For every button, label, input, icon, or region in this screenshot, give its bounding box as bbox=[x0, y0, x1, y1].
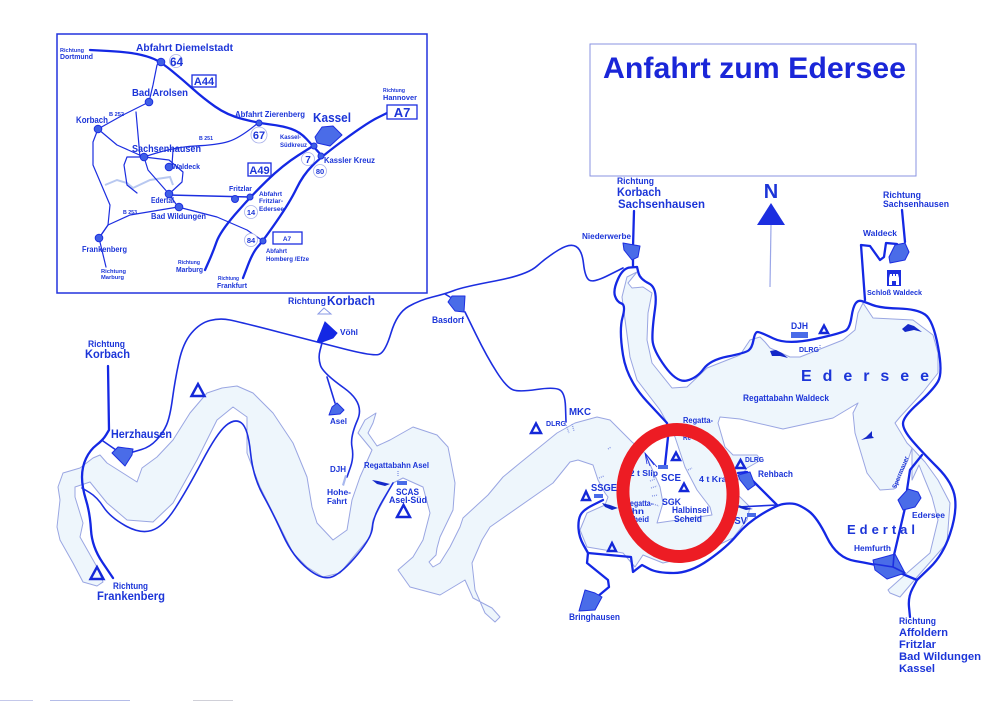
town: Rehbach bbox=[738, 472, 755, 490]
map labels: Edersee bbox=[912, 510, 945, 520]
road: Rehbach jetty bbox=[738, 505, 777, 507]
map labels: Regatta- bbox=[683, 416, 713, 425]
autobahn label boxes bbox=[192, 75, 417, 244]
north arrow bbox=[757, 181, 785, 287]
inset labels: Bad Arolsen bbox=[132, 88, 188, 99]
inset labels: Richtung bbox=[101, 269, 126, 275]
autobahn A44 bbox=[90, 50, 322, 156]
camping tent icons bbox=[90, 326, 828, 579]
inset labels: Kassler Kreuz bbox=[324, 156, 375, 165]
map labels: DLRG bbox=[799, 347, 820, 354]
map labels: Scheid bbox=[674, 514, 702, 524]
inset labels: A7 bbox=[394, 105, 410, 120]
icon: diver Waldeck bbox=[770, 350, 788, 358]
inset frame bbox=[57, 34, 427, 293]
map labels: SSGE bbox=[591, 482, 617, 494]
inset labels: Richtung bbox=[218, 276, 239, 282]
map labels: Basdorf bbox=[432, 315, 465, 325]
map labels: Sperrmauer bbox=[891, 455, 911, 490]
inset labels: Hannover bbox=[383, 93, 417, 102]
buoy and slip markers bbox=[398, 345, 820, 506]
map labels: Fritzlar bbox=[899, 639, 937, 651]
autobahn A49 bbox=[205, 146, 313, 270]
icon: DJH Hohe-Fahrt hostel bbox=[342, 475, 347, 486]
road: south shore and Hemfurth bbox=[588, 504, 917, 617]
inset labels: 67 bbox=[253, 130, 265, 142]
inset minor roads bbox=[93, 62, 263, 267]
icon: rowing boat Rehbach bbox=[738, 505, 753, 510]
inset labels: Waldeck bbox=[172, 162, 201, 171]
road: Rehbach bbox=[738, 472, 777, 505]
town: Niederwerbe bbox=[623, 243, 640, 260]
map labels: Re bbox=[683, 433, 691, 442]
map labels: Edertal bbox=[847, 522, 915, 537]
map labels: Richtung bbox=[113, 581, 148, 591]
road: Niederwerbe north bbox=[633, 211, 634, 247]
inset labels: 14 bbox=[247, 208, 256, 217]
map labels: Waldeck bbox=[863, 228, 897, 238]
inset labels: Edertal bbox=[151, 196, 174, 205]
map labels: Scheid bbox=[624, 515, 649, 524]
inset labels: 64 bbox=[170, 55, 183, 69]
club house bars bbox=[397, 332, 808, 517]
map labels: Niederwerbe bbox=[582, 231, 631, 241]
map labels: DLRG bbox=[745, 457, 765, 464]
road: along the western river bbox=[82, 421, 393, 578]
inset labels: 80 bbox=[316, 167, 324, 176]
road: Basdorf stub bbox=[445, 294, 450, 297]
map labels: Richtung bbox=[899, 616, 936, 626]
map labels: MKC bbox=[569, 407, 591, 418]
map labels: Herzhausen bbox=[111, 427, 172, 441]
icon: castle Schloss Waldeck bbox=[887, 270, 901, 286]
inset labels: A7 bbox=[283, 236, 292, 243]
map labels: DJH bbox=[791, 321, 808, 331]
map labels: Korbach bbox=[327, 294, 375, 308]
road: Edersee to Hemfurth bbox=[894, 508, 905, 555]
Kassel city shape bbox=[315, 126, 342, 146]
inset map: regional overview bbox=[57, 34, 427, 293]
inset lake squiggle bbox=[105, 177, 173, 188]
inset labels: Abfahrt bbox=[266, 248, 288, 255]
map labels: SCE bbox=[661, 472, 681, 484]
inset labels: Dortmund bbox=[60, 52, 93, 61]
road: west shore to Scheid bbox=[614, 267, 668, 465]
town: Bringhausen bbox=[579, 590, 602, 611]
road: Sachsenhausen north bbox=[902, 210, 905, 242]
inset labels: Richtung bbox=[178, 260, 200, 266]
town: Herzhausen bbox=[112, 447, 133, 466]
inset labels: Richtung bbox=[383, 88, 405, 94]
town: Waldeck bbox=[889, 243, 909, 263]
town: Voehl bbox=[317, 322, 337, 342]
inset labels: Bad Wildungen bbox=[151, 211, 206, 221]
inset labels bbox=[60, 42, 417, 290]
town: Edersee bbox=[898, 489, 921, 510]
inset labels: Korbach bbox=[76, 115, 108, 125]
inset labels: Homberg /Efze bbox=[266, 256, 309, 263]
inset labels: Kassel bbox=[313, 110, 351, 125]
road: Herzhausen stub bbox=[103, 441, 116, 450]
map labels: 4 t Kran bbox=[699, 475, 732, 484]
map labels: Kassel bbox=[899, 663, 935, 675]
map labels: 12 t Slip bbox=[625, 468, 658, 478]
inset labels: Fritzlar bbox=[229, 186, 252, 193]
inset labels: Abfahrt bbox=[259, 191, 283, 198]
road: Bringhausen bbox=[578, 500, 609, 597]
road: Basdorf to MKC bbox=[465, 312, 566, 422]
road: Voehl to Hohe-Fahrt bbox=[319, 343, 359, 477]
map labels: DJH bbox=[330, 464, 346, 474]
inset labels: A49 bbox=[249, 165, 270, 177]
map labels: Affoldern bbox=[899, 627, 948, 639]
map labels bbox=[85, 176, 981, 675]
map labels: Frankenberg bbox=[97, 591, 165, 603]
exit number circles bbox=[170, 54, 326, 246]
town: Basdorf bbox=[448, 296, 465, 312]
map labels: Korbach bbox=[617, 187, 661, 199]
icon: diver east bay bbox=[902, 324, 922, 332]
autobahn A7 bbox=[243, 113, 387, 278]
road: dam bbox=[907, 455, 922, 490]
north arrow: N bbox=[764, 181, 778, 203]
map labels: DLRG bbox=[546, 421, 567, 428]
inset labels: Marburg bbox=[176, 265, 203, 274]
road: Korbach to Frankenberg bbox=[82, 366, 113, 578]
inset town dots bbox=[94, 58, 324, 244]
map labels: GSV bbox=[727, 516, 747, 527]
lake: Edersee water body bbox=[57, 272, 950, 622]
map labels: Richtung bbox=[617, 176, 654, 186]
map labels: Korbach bbox=[85, 349, 130, 361]
road: Asel branch bbox=[327, 377, 335, 403]
icon: rowing boat Scheid west bbox=[602, 503, 618, 510]
inset labels: B 251 bbox=[199, 136, 213, 142]
title box: Anfahrt zum Edersee bbox=[603, 52, 906, 85]
inset labels: Sachsenhausen bbox=[132, 143, 201, 155]
map labels: Asel-Süd bbox=[389, 495, 427, 505]
map labels: Hemfurth bbox=[854, 543, 891, 553]
title box bbox=[590, 44, 916, 176]
map labels: Richtung bbox=[288, 296, 326, 306]
main road network bbox=[82, 210, 955, 617]
map labels: Sachsenhausen bbox=[618, 199, 705, 211]
town: Asel bbox=[329, 403, 344, 415]
map labels: Regatta- bbox=[625, 499, 653, 508]
inset labels: B 252 bbox=[109, 112, 124, 118]
inset labels: 84 bbox=[247, 236, 256, 245]
map labels: Regattabahn Waldeck bbox=[743, 393, 830, 403]
map labels: Edersee bbox=[801, 368, 929, 385]
map labels: bahn bbox=[620, 507, 644, 516]
inset labels: Richtung bbox=[60, 48, 84, 54]
inset labels: Frankfurt bbox=[217, 281, 247, 290]
map labels: Fahrt bbox=[327, 496, 347, 506]
red highlight ring around Halbinsel Scheid bbox=[619, 426, 737, 560]
map labels: SCAS bbox=[396, 487, 419, 497]
inset labels: Frankenberg bbox=[82, 245, 127, 254]
inset labels: Marburg bbox=[101, 275, 124, 281]
inset labels: A44 bbox=[194, 76, 215, 88]
road: north shore of Edersee bbox=[637, 267, 955, 580]
map labels: Vöhl bbox=[340, 327, 358, 337]
Voehl direction arrow bbox=[318, 308, 331, 314]
inset labels: Südkreuz bbox=[280, 142, 308, 149]
town shapes bbox=[112, 243, 921, 611]
road: Herzhausen to Voehl and Niederwerbe bbox=[133, 245, 623, 452]
map labels: Bringhausen bbox=[569, 612, 620, 622]
map labels: Asel bbox=[330, 416, 347, 426]
map labels: Bad Wildungen bbox=[899, 651, 981, 663]
map labels: Regattabahn Asel bbox=[364, 461, 429, 470]
icon: water skier bbox=[861, 431, 874, 440]
map labels: Richtung bbox=[883, 190, 921, 200]
road: Niederwerbe stub bbox=[632, 260, 634, 267]
map labels: Sachsenhausen bbox=[883, 199, 949, 210]
inset labels: Fritzlar- bbox=[259, 198, 283, 205]
inset labels: Kassel- bbox=[280, 134, 301, 141]
inset labels: 7 bbox=[305, 155, 311, 166]
road: Waldeck bbox=[861, 243, 897, 300]
inset labels: Abfahrt Zierenberg bbox=[235, 109, 305, 119]
map labels: Schloß Waldeck bbox=[867, 288, 923, 297]
map labels: SGK bbox=[662, 497, 681, 507]
town: Hemfurth bbox=[873, 554, 905, 579]
inset labels: Abfahrt Diemelstadt bbox=[136, 42, 233, 54]
inset labels: B 253 bbox=[123, 210, 137, 216]
icon: sailboat trailer Asel bbox=[372, 480, 390, 486]
water sport symbols bbox=[372, 324, 922, 510]
inset labels: Edersee bbox=[259, 206, 284, 213]
map labels: Rehbach bbox=[758, 469, 793, 479]
map labels: Richtung bbox=[88, 339, 125, 349]
map labels: Hohe- bbox=[327, 487, 351, 497]
scan edge marks bbox=[0, 700, 233, 701]
map labels: Halbinsel bbox=[672, 505, 709, 515]
